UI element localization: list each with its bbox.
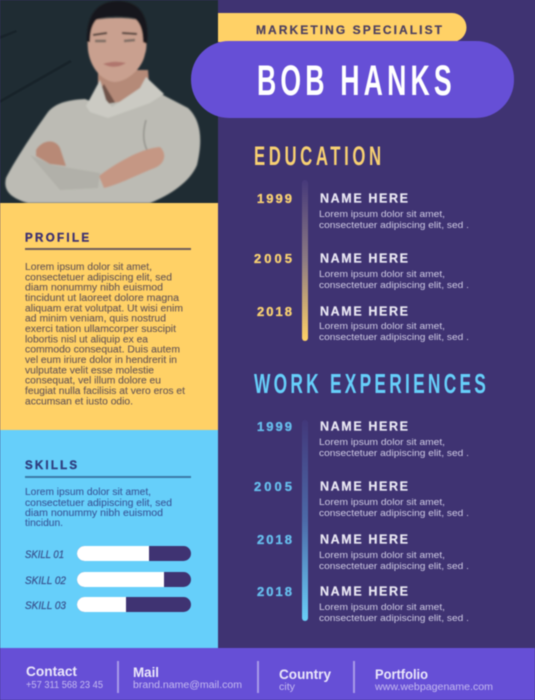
work timeline bbox=[254, 419, 469, 624]
text block: profile body: ad minim veniam, quis nostrud bbox=[25, 314, 166, 325]
job title banner: MARKETING SPECIALIST bbox=[256, 23, 443, 37]
work entry 2005: 2005 bbox=[254, 479, 292, 494]
education entry 2005: Lorem ipsum dolor sit amet, bbox=[319, 269, 445, 280]
text block: profile body: diam nonummy nibh euismod bbox=[25, 283, 163, 294]
education entry 1999: consectetuer adipiscing elit, sed . bbox=[319, 220, 469, 231]
text block: skills body: consectetuer adipiscing elit, sed bbox=[25, 498, 172, 509]
name banner bbox=[191, 41, 514, 118]
education entry 2018: Lorem ipsum dolor sit amet, bbox=[319, 321, 445, 332]
heading: education: EDUCATION bbox=[254, 141, 381, 171]
panel: profile bbox=[0, 203, 218, 430]
skill bar 01 bbox=[25, 546, 191, 561]
work entry 1999: NAME HERE bbox=[320, 420, 408, 434]
work entry 2005: Lorem ipsum dolor sit amet, bbox=[319, 497, 445, 508]
work entry 2018: NAME HERE bbox=[320, 532, 408, 546]
education entry 1999: 1999 bbox=[257, 191, 292, 206]
text block: profile body: accumsan et iusto odio. bbox=[25, 396, 133, 407]
footer: mail bbox=[133, 665, 242, 691]
education entry 2018 bbox=[257, 304, 469, 343]
education entry 1999: Lorem ipsum dolor sit amet, bbox=[319, 209, 445, 220]
education entry 2018: consectetuer adipiscing elit, sed . bbox=[319, 332, 469, 343]
text block: profile body: aliquam erat volutpat. Ut wisi enim bbox=[25, 303, 183, 314]
footer: portfolio: www.webpagename.com bbox=[374, 682, 493, 693]
work entry 2018 bbox=[257, 532, 469, 572]
heading: skills: SKILLS bbox=[25, 460, 77, 472]
skill bar 03 bbox=[25, 597, 191, 612]
work entry 2018 second: NAME HERE bbox=[320, 584, 408, 598]
education entry 1999 bbox=[257, 191, 469, 231]
work entry 1999: Lorem ipsum dolor sit amet, bbox=[319, 437, 445, 448]
footer: country: Country bbox=[279, 667, 331, 682]
skill bar 02 bbox=[25, 572, 191, 587]
footer: mail: Mail bbox=[133, 665, 159, 680]
name banner: BOB HANKS bbox=[257, 57, 452, 105]
work entry 2018: consectetuer adipiscing elit, sed . bbox=[319, 561, 469, 572]
work entry 2018 second: 2018 bbox=[257, 584, 292, 599]
text block: profile body: Lorem ipsum dolor sit amet, bbox=[25, 262, 152, 273]
panel: skills bbox=[0, 430, 218, 648]
footer: portfolio: Portfolio bbox=[375, 667, 428, 682]
work entry 1999: consectetuer adipiscing elit, sed . bbox=[319, 448, 469, 459]
text block: profile body: lobortis nisl ut aliquip ex ea bbox=[25, 334, 149, 345]
footer: contact bbox=[26, 664, 103, 691]
heading: profile: PROFILE bbox=[25, 232, 89, 244]
text block: profile body: tincidunt ut laoreet dolore magna bbox=[25, 293, 180, 304]
work entry 2018 second: consectetuer adipiscing elit, sed . bbox=[319, 613, 469, 624]
text block: skills body: diam nonummy nibh euismod bbox=[25, 508, 163, 519]
education entry 2005: NAME HERE bbox=[320, 252, 408, 266]
heading: work experiences: WORK EXPERIENCES bbox=[254, 368, 486, 399]
text block: profile body bbox=[25, 262, 185, 407]
footer: country bbox=[279, 667, 331, 693]
text block: profile body: vel eum iriure dolor in hendrerit in bbox=[25, 355, 177, 366]
work entry 2018: Lorem ipsum dolor sit amet, bbox=[319, 550, 445, 561]
text block: profile body: commodo consequat. Duis autem bbox=[25, 345, 180, 356]
skill bar 03: SKILL 03 bbox=[25, 600, 67, 612]
work entry 2005: NAME HERE bbox=[320, 480, 408, 494]
footer: contact: +57 311 568 23 45 bbox=[26, 680, 103, 691]
skill bar 02: SKILL 02 bbox=[25, 575, 66, 587]
text block: profile body: feugiat nulla facilisis at vero eros et bbox=[25, 386, 185, 397]
education entry 2005: consectetuer adipiscing elit, sed . bbox=[319, 280, 469, 291]
work entry 2005 bbox=[254, 479, 469, 519]
text block: profile body: vulputate velit esse molestie bbox=[25, 365, 154, 376]
text block: profile body: consequat, vel illum dolore eu bbox=[25, 376, 161, 387]
footer: country: city bbox=[279, 682, 295, 693]
text block: skills body bbox=[25, 487, 172, 529]
text block: skills body: tincidun. bbox=[25, 518, 63, 529]
work entry 2018: 2018 bbox=[257, 532, 292, 547]
skill bar 01: SKILL 01 bbox=[25, 549, 64, 561]
text block: profile body: exerci tation ullamcorper suscipit bbox=[25, 324, 176, 335]
education entry 2005: 2005 bbox=[254, 251, 292, 266]
job title banner bbox=[218, 13, 466, 42]
work entry 1999: 1999 bbox=[257, 419, 292, 434]
education entry 1999: NAME HERE bbox=[320, 192, 408, 206]
education entry 2018: NAME HERE bbox=[320, 304, 408, 318]
education entry 2005 bbox=[254, 251, 469, 291]
work entry 2018 second: Lorem ipsum dolor sit amet, bbox=[319, 602, 445, 613]
footer bbox=[0, 648, 535, 700]
work entry 2018 second bbox=[257, 584, 469, 624]
photo: man with crossed arms bbox=[0, 0, 218, 203]
footer: contact: Contact bbox=[26, 664, 78, 679]
panel: right column background bbox=[218, 0, 535, 648]
education entry 2018: 2018 bbox=[257, 304, 292, 319]
text block: skills body: Lorem ipsum dolor sit amet, bbox=[25, 487, 151, 498]
work entry 2005: consectetuer adipiscing elit, sed . bbox=[319, 508, 469, 519]
education timeline bbox=[254, 180, 469, 343]
work entry 1999 bbox=[257, 419, 469, 459]
text block: profile body: consectetuer adipiscing elit, sed bbox=[25, 272, 172, 283]
footer: portfolio bbox=[374, 667, 493, 693]
footer: mail: brand.name@mail.com bbox=[133, 680, 242, 691]
